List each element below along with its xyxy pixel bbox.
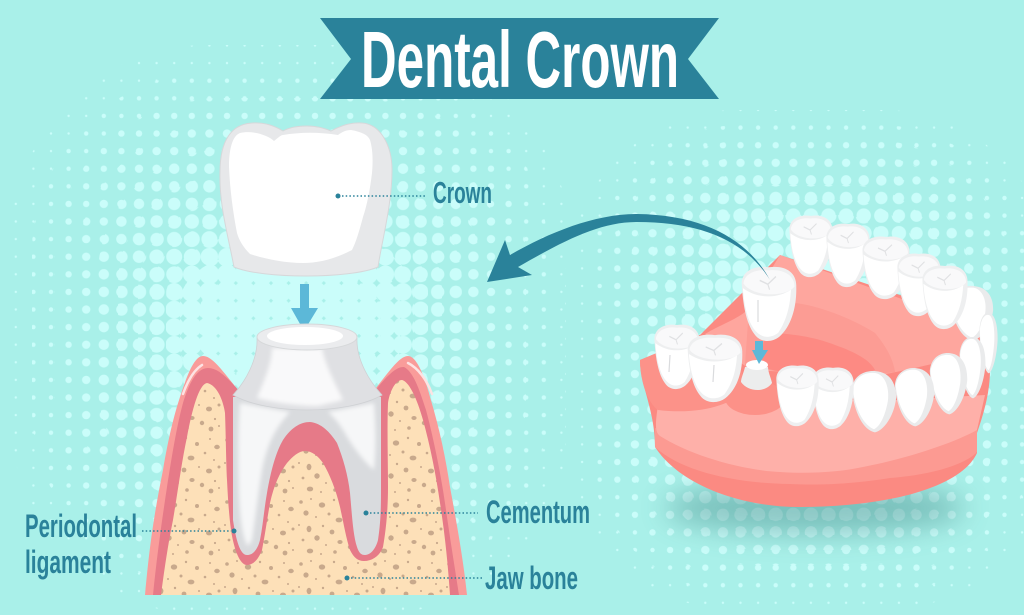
right halftone dots: [565, 110, 1024, 610]
outer gum: [145, 356, 467, 595]
palate centre: [760, 333, 875, 377]
bone with pores: [161, 380, 450, 595]
left gum side: [640, 335, 748, 411]
label: Jaw bone: [344, 560, 578, 596]
palate: [705, 255, 975, 375]
gum base: [640, 255, 990, 507]
gum around stump: [725, 381, 785, 415]
left halftone dots: [10, 45, 570, 615]
roots: [233, 397, 381, 555]
gum front: [656, 395, 985, 473]
tooth stump with roots: [233, 324, 382, 555]
label: Periodontal ligament: ligament: [25, 544, 111, 580]
collar: [233, 338, 382, 410]
prepared stump: [741, 360, 772, 390]
label: Crown: [336, 175, 492, 210]
label: Crown: Crown: [433, 175, 492, 210]
label: Jaw bone: Jaw bone: [485, 560, 578, 596]
jaw shadow: [665, 482, 965, 534]
back teeth: [789, 216, 998, 373]
collar top: [257, 324, 357, 350]
palate middle: [745, 303, 895, 375]
label: Periodontal ligament: Periodontal: [25, 508, 137, 544]
left molars: [654, 325, 742, 402]
collar highlight: [257, 348, 343, 406]
crown tooth: [220, 123, 392, 276]
root highlights: [238, 403, 376, 546]
small arrow: [752, 341, 768, 364]
arrow: crown down to stump: [291, 284, 318, 331]
jaw model: [640, 216, 998, 507]
label: Cementum: Cementum: [486, 494, 590, 530]
label: Periodontal ligament: [25, 508, 236, 580]
front teeth: [776, 337, 985, 432]
inner gum: [153, 367, 459, 595]
gum and jaw bone cross-section: [145, 356, 467, 595]
floating crown: [742, 267, 796, 341]
curved arrow: [487, 214, 770, 282]
gum highlights: [183, 363, 432, 394]
gum mid band: [655, 425, 977, 485]
title banner: [320, 15, 719, 104]
title: Dental Crown: [361, 15, 679, 104]
label: Cementum: [364, 494, 590, 530]
